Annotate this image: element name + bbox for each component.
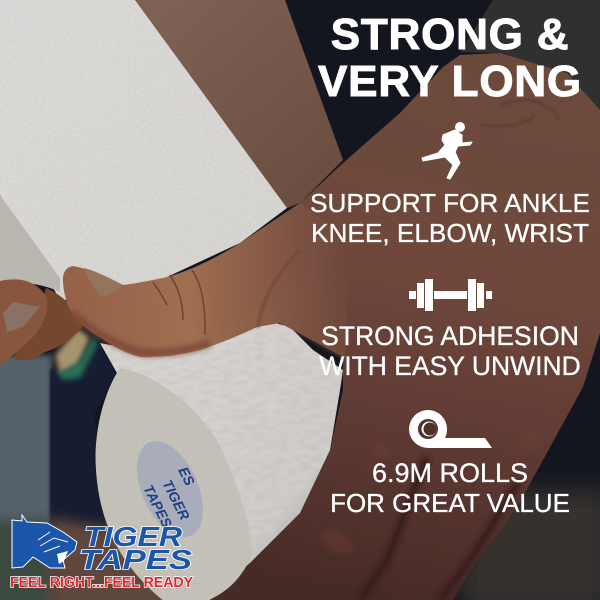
icon: dumbbell (409, 279, 492, 311)
logo icon: tiger head (12, 515, 77, 568)
thumb creases (153, 270, 205, 335)
background: navy shorts (50, 337, 130, 540)
background: lower right (460, 490, 600, 600)
title: VERY LONG (318, 57, 582, 106)
logo wordmark (79, 521, 192, 575)
core print: TIGER (159, 477, 193, 523)
text: support (310, 188, 590, 248)
text: value (330, 458, 570, 518)
roll texture (120, 340, 340, 522)
finger gaps (360, 457, 520, 600)
logo wordmark: TIGER (84, 521, 183, 552)
title (318, 10, 582, 106)
roll core (124, 431, 216, 547)
left index finger (0, 279, 48, 365)
background: lower left green and skin blur (0, 520, 60, 600)
text: support: SUPPORT FOR ANKLE (310, 188, 590, 218)
logo wordmark: TAPES (79, 544, 192, 575)
background: lower left grey (0, 355, 52, 600)
logo tagline: FEEL RIGHT...FEEL READY (10, 574, 193, 591)
fingernail (3, 302, 40, 332)
tape sheet (0, 0, 300, 310)
left second finger (13, 288, 84, 360)
hand (210, 53, 600, 600)
tape roll body (100, 324, 343, 566)
text: adhesion: WITH EASY UNWIND (319, 351, 581, 381)
icon: tape roll (409, 410, 492, 448)
core print: ES (175, 464, 198, 489)
text: value: FOR GREAT VALUE (330, 488, 570, 518)
title: STRONG & (331, 10, 569, 59)
forearm (135, 0, 343, 208)
logo: Tiger Tapes (10, 514, 194, 591)
background: grey sleeve top right (460, 0, 600, 110)
text: support: KNEE, ELBOW, WRIST (311, 218, 589, 248)
core print: TAPES (140, 482, 176, 531)
tape curl at left (0, 195, 60, 292)
end face grain (90, 360, 260, 600)
icon: runner (422, 122, 472, 180)
text: adhesion: STRONG ADHESION (321, 321, 579, 351)
text: adhesion (319, 321, 581, 381)
tape roll end (96, 368, 252, 600)
core print (144, 468, 194, 526)
wrist wrinkle (280, 323, 343, 358)
knuckles (321, 430, 540, 555)
thumb (63, 203, 350, 358)
text: value: 6.9M ROLLS (372, 458, 528, 488)
arm hair shadow (480, 100, 560, 126)
background: yellow and green blur (55, 328, 90, 375)
roll end face (96, 368, 253, 600)
palm fold (258, 250, 300, 328)
thumbnail (84, 268, 123, 296)
thumb underside shadow (72, 312, 210, 353)
